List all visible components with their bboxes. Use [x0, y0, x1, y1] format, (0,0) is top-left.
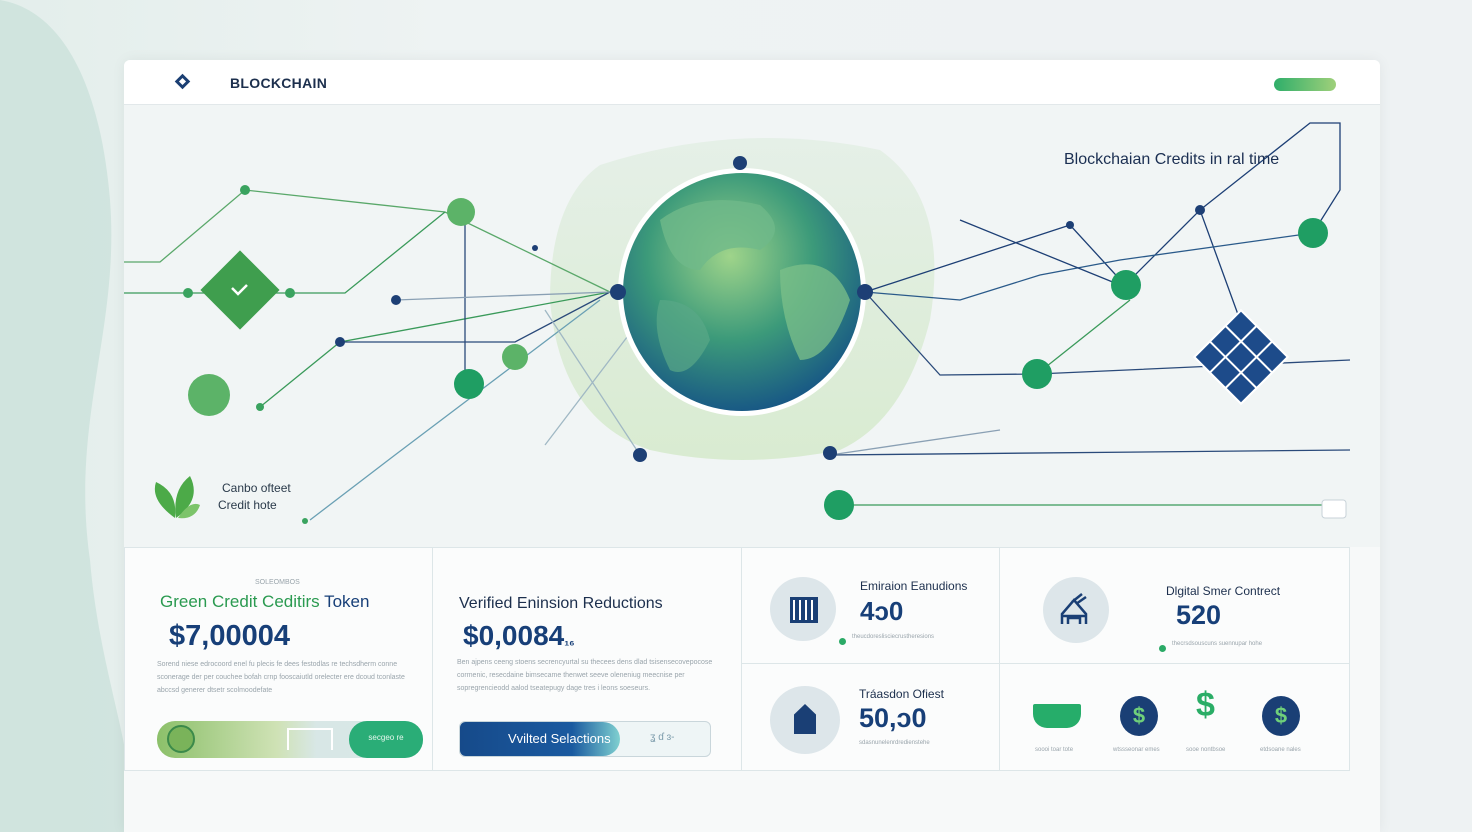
panel: digital smart contract: 520 [1176, 600, 1221, 630]
network hero: Credit hote [218, 498, 277, 512]
hero title: Blockchaian Credits in ral time [1064, 151, 1279, 168]
panel: verified emission reductions: $0,0084₁₆ [463, 620, 575, 651]
solar panel diamond [1194, 310, 1288, 404]
header progress pill [1274, 78, 1336, 91]
action pill: secgeo re [368, 733, 404, 742]
leaf icon [155, 476, 200, 518]
header bar [124, 60, 1380, 105]
brand name: BLOCKCHAIN [230, 75, 327, 91]
panel: digital smart contract [999, 547, 1350, 664]
panel: icon row: $ [1196, 686, 1215, 724]
diamond check [200, 250, 280, 330]
panel: transaction offset: Tráasdon Ofiest [859, 687, 944, 701]
background decorative wave [0, 0, 124, 832]
panel: emission reductions stat: Emiraion Eanudions [860, 579, 967, 593]
panel: digital smart contract: thecrsdsouscuns suennupar hohe [1172, 641, 1262, 647]
network hero [124, 122, 1350, 524]
nodes [335, 156, 1205, 462]
action pill: ʓ ɗ ɜ- [650, 732, 674, 743]
panel: icon row: sooe nontbsoe [1186, 747, 1225, 753]
panel: verified emission reductions: Verified Eninsion Reductions [459, 595, 663, 612]
panel: icon row: $ [1133, 703, 1145, 728]
panel: transaction offset: sdasnunelenrdredienstehe [859, 740, 930, 746]
globe [618, 168, 866, 416]
panel: green credit token: SOLEOMBOS [255, 579, 300, 586]
main card [124, 60, 1380, 832]
panel: green credit token: Sorend niese edrocoord enel fu plecis fe dees festodlas re techsdherm conne sconerage der per couchee bofah crnp fooscaiutld orelecter ere dcoud tconlaste abccsd generer dtsetr scolmoodefate [157, 661, 405, 694]
panel: icon row [999, 663, 1350, 771]
value: $7,00004 [169, 620, 290, 652]
panel: transaction offset [742, 686, 999, 771]
panel: emission reductions stat [741, 547, 1000, 664]
action pill [459, 721, 711, 757]
panel: icon row: etdsoane nales [1260, 747, 1301, 753]
panel: verified emission reductions: Ben ajpens ceeng stoens secrencyurtal su thecees dens dlad tsisensecovepocose cormenic, resecdaine bimsecame thenwet seeve oleneniug meecnise per sopregrencieodd aalod tseatepugy dage tres i leons soeseurs. [457, 659, 712, 692]
panel: transaction offset: 50,ɔ0 [859, 703, 927, 733]
logo icon [175, 74, 190, 89]
panel: verified emission reductions [432, 547, 742, 771]
panel: icon row: soooi toar tote [1035, 747, 1073, 753]
action pill [157, 721, 423, 758]
panel: emission reductions stat: theucdoreslisciecrustheresions [852, 634, 934, 640]
panel: green credit token [124, 547, 433, 771]
heading: Green Credit Ceditirs Token [160, 592, 369, 611]
panel: emission reductions stat: 4ɔ0 [860, 596, 903, 626]
carbon label: Canbo ofteet [222, 481, 291, 495]
panel: icon row: wtssseonar emes [1113, 747, 1160, 753]
panel: digital smart contract: Dlgital Smeɾ Contrect [1166, 584, 1280, 598]
panel: icon row: $ [1275, 703, 1287, 728]
action pill: Vvilted Selactions [508, 731, 611, 746]
